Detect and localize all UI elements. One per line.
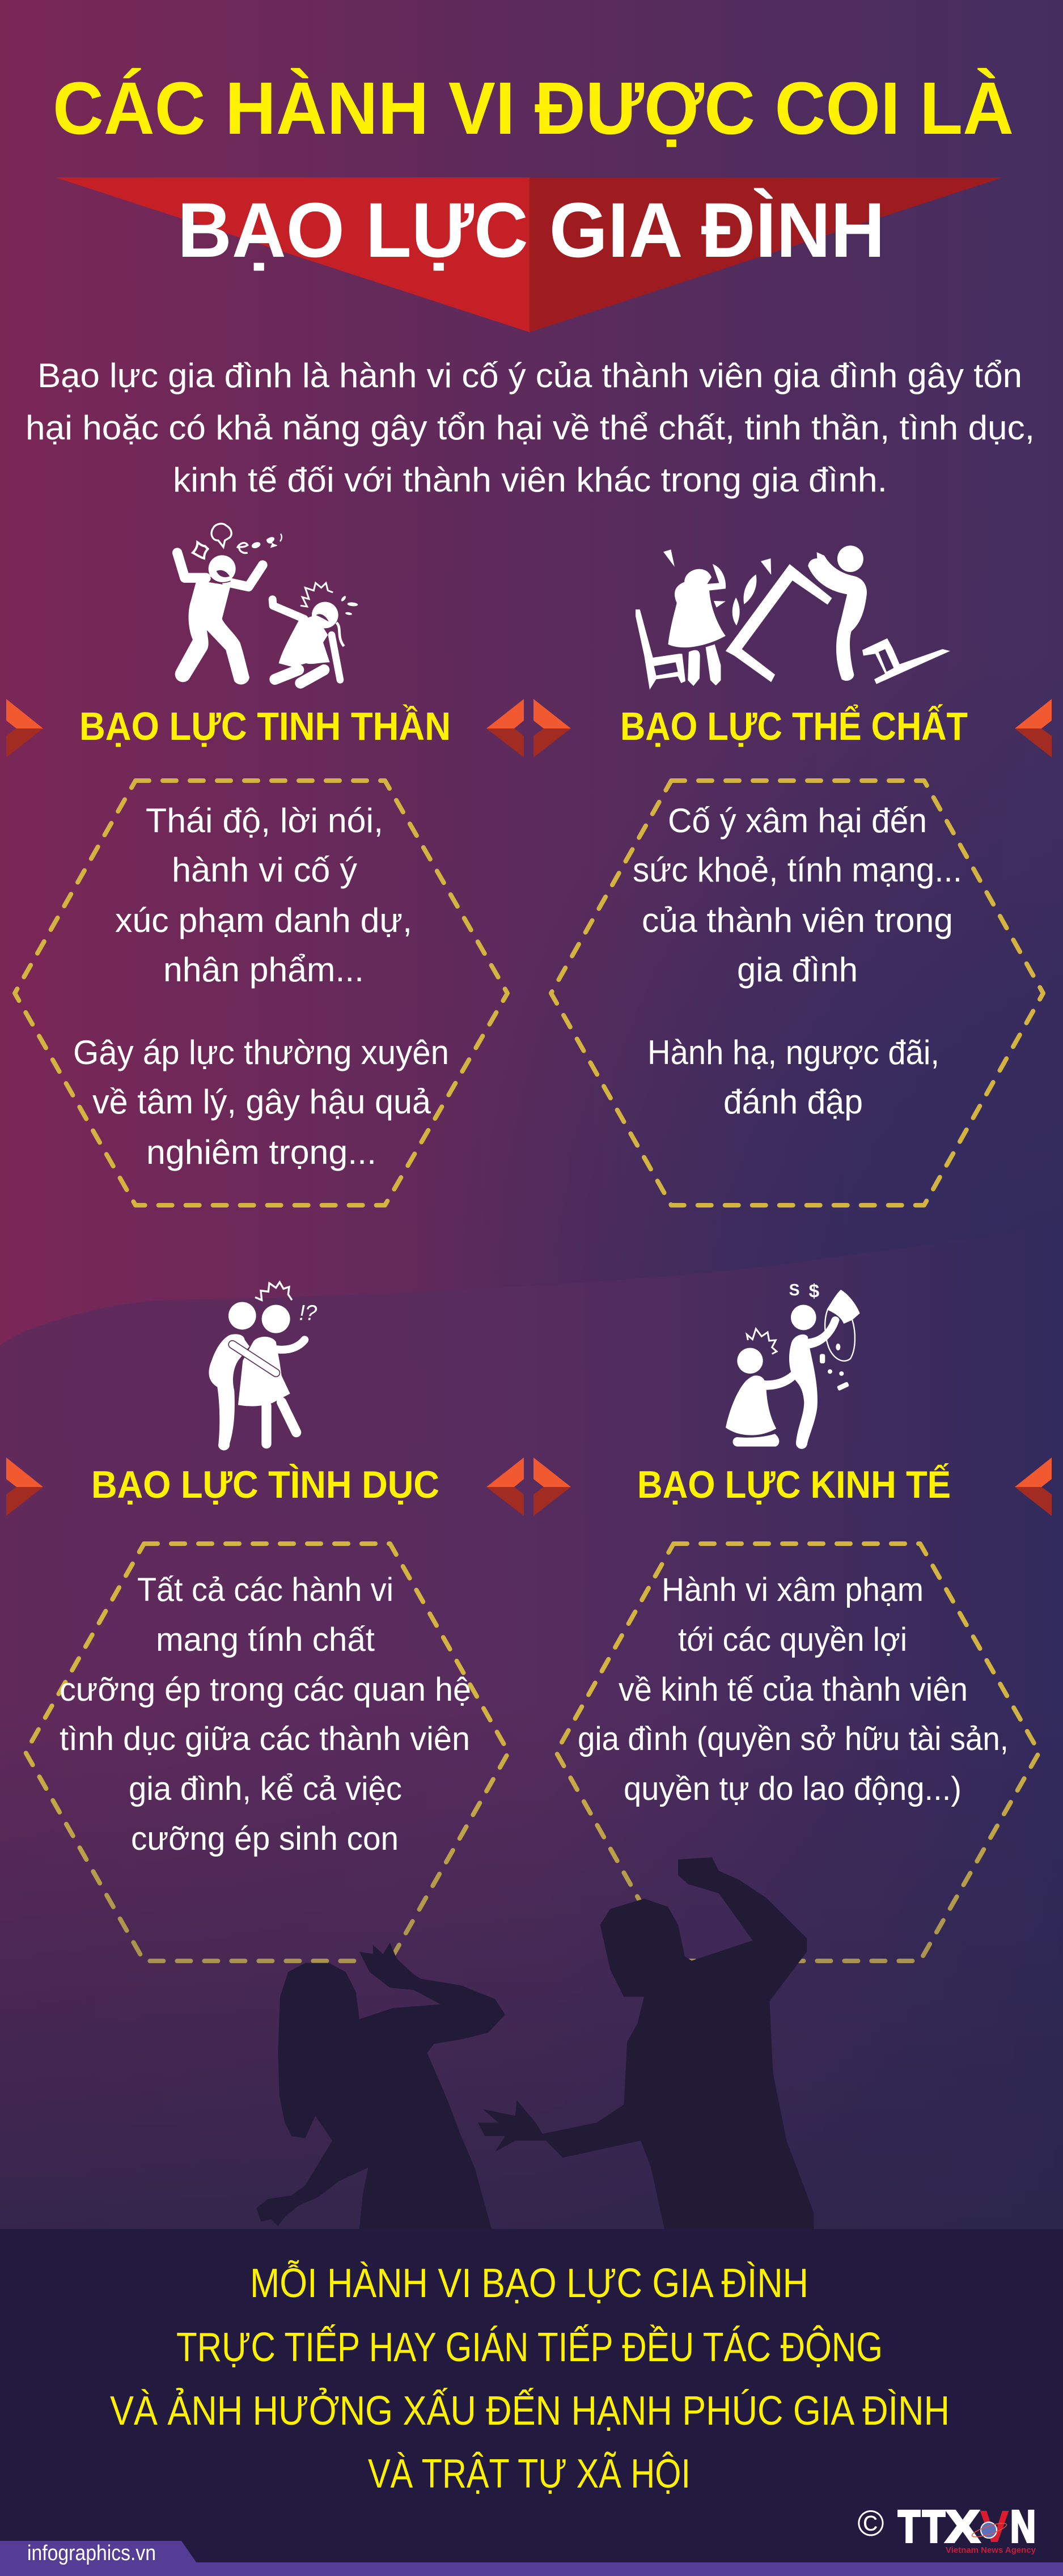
icon: verbal abuse xyxy=(175,524,358,684)
silhouette: woman xyxy=(256,1943,505,2229)
intro text xyxy=(26,357,1035,499)
hexagon text: physical violence: đánh đập xyxy=(723,1083,863,1121)
hexagon: sexual violence xyxy=(26,1544,509,1961)
footer bar xyxy=(0,2562,1063,2576)
hexagon text: physical violence: Cố ý xâm hại đến xyxy=(668,802,927,840)
icon: sexual violence xyxy=(209,1282,317,1450)
hexagon text: sexual violence: gia đình, kể cả việc xyxy=(129,1770,402,1807)
hexagon text: sexual violence: Tất cả các hành vi xyxy=(137,1571,393,1608)
icon: sexual violence: !? xyxy=(299,1300,317,1325)
hexagon text: sexual violence: cưỡng ép sinh con xyxy=(131,1820,399,1857)
hexagon: physical violence xyxy=(551,781,1043,1205)
hexagon text: mental violence: xúc phạm danh dự, xyxy=(115,901,412,939)
footer site name: infographics.vn xyxy=(27,2541,156,2565)
copyright symbol: © xyxy=(857,2503,884,2544)
hexagon text: sexual violence: tình dục giữa các thành viên xyxy=(60,1721,470,1757)
hexagon text: physical violence xyxy=(633,802,962,1121)
icon: economic violence: $ xyxy=(809,1281,820,1302)
hexagon text: economic violence: quyền tự do lao động...) xyxy=(624,1770,962,1807)
intro text: Bạo lực gia đình là hành vi cố ý của thành viên gia đình gây tổn xyxy=(37,357,1022,395)
logo: TTXVN: X xyxy=(946,2501,980,2552)
logo: TTXVN: V xyxy=(980,2501,1009,2552)
hexagon text: mental violence: Gây áp lực thường xuyên xyxy=(73,1033,449,1071)
title: CÁC HÀNH VI ĐƯỢC COI LÀ xyxy=(53,66,1014,150)
arrows: mental violence heading xyxy=(6,699,1052,757)
subtitle: BẠO LỰC GIA ĐÌNH xyxy=(177,187,885,274)
logo: TTXVN: Vietnam News Agency xyxy=(946,2545,1036,2555)
hexagon text: physical violence: gia đình xyxy=(737,951,858,989)
arrows: sexual violence heading xyxy=(6,1458,1052,1516)
hexagon text: physical violence: của thành viên trong xyxy=(642,901,953,939)
bottom panel xyxy=(0,2229,1063,2576)
footer tab xyxy=(0,2541,197,2563)
closing message: MỖI HÀNH VI BẠO LỰC GIA ĐÌNH xyxy=(250,2260,808,2306)
logo: TTXVN: N xyxy=(1010,2501,1036,2552)
hexagon text: mental violence xyxy=(73,802,449,1171)
hexagon text: sexual violence: mang tính chất xyxy=(156,1621,375,1658)
hexagon text: mental violence: Thái độ, lời nói, xyxy=(146,802,383,840)
intro text: hại hoặc có khả năng gây tổn hại về thể chất, tinh thần, tình dục, xyxy=(26,409,1035,447)
heading: economic violence: BẠO LỰC KINH TẾ xyxy=(637,1463,951,1506)
hexagon text: economic violence: về kinh tế của thành viên xyxy=(619,1671,968,1708)
hexagon text: economic violence: gia đình (quyền sở hữu tài sản, xyxy=(578,1721,1009,1757)
heading: physical violence: BẠO LỰC THỂ CHẤT xyxy=(620,704,968,748)
hexagon text: physical violence: sức khoẻ, tính mạng... xyxy=(633,851,962,889)
hexagon text: mental violence: về tâm lý, gây hậu quả xyxy=(92,1083,431,1121)
icon: physical violence xyxy=(636,545,950,690)
hexagon text: economic violence: tới các quyền lợi xyxy=(678,1621,907,1658)
heading: sexual violence: BẠO LỰC TÌNH DỤC xyxy=(91,1463,439,1506)
red triangle banner xyxy=(56,177,1003,332)
heading: mental violence: BẠO LỰC TINH THẦN xyxy=(79,704,451,748)
hexagon text: mental violence: nhân phẩm... xyxy=(163,951,364,989)
logo: TTXVN: T xyxy=(922,2501,945,2552)
closing message: VÀ TRẬT TỰ XÃ HỘI xyxy=(368,2451,691,2497)
closing message xyxy=(110,2260,950,2497)
silhouette: man xyxy=(478,1857,814,2229)
icon: economic violence xyxy=(726,1281,860,1449)
hexagon: mental violence xyxy=(15,781,507,1205)
hexagon text: economic violence: Hành vi xâm phạm xyxy=(662,1571,924,1608)
hexagon text: mental violence: nghiêm trọng... xyxy=(146,1133,376,1171)
logo: TTXVN: T xyxy=(898,2501,920,2552)
intro text: kinh tế đối với thành viên khác trong gia đình. xyxy=(173,461,887,499)
closing message: TRỰC TIẾP HAY GIÁN TIẾP ĐỀU TÁC ĐỘNG xyxy=(176,2324,883,2370)
hexagon text: sexual violence xyxy=(60,1571,471,1857)
hexagon text: economic violence xyxy=(578,1571,1009,1807)
hexagon text: physical violence: Hành hạ, ngược đãi, xyxy=(647,1033,939,1071)
icon: economic violence: S xyxy=(789,1281,800,1299)
logo: TTXVN xyxy=(898,2501,1036,2555)
closing message: VÀ ẢNH HƯỞNG XẤU ĐẾN HẠNH PHÚC GIA ĐÌNH xyxy=(110,2388,950,2434)
hexagon: economic violence xyxy=(556,1544,1039,1961)
hexagon text: sexual violence: cưỡng ép trong các quan hệ xyxy=(60,1671,471,1708)
hexagon text: mental violence: hành vi cố ý xyxy=(172,851,357,889)
